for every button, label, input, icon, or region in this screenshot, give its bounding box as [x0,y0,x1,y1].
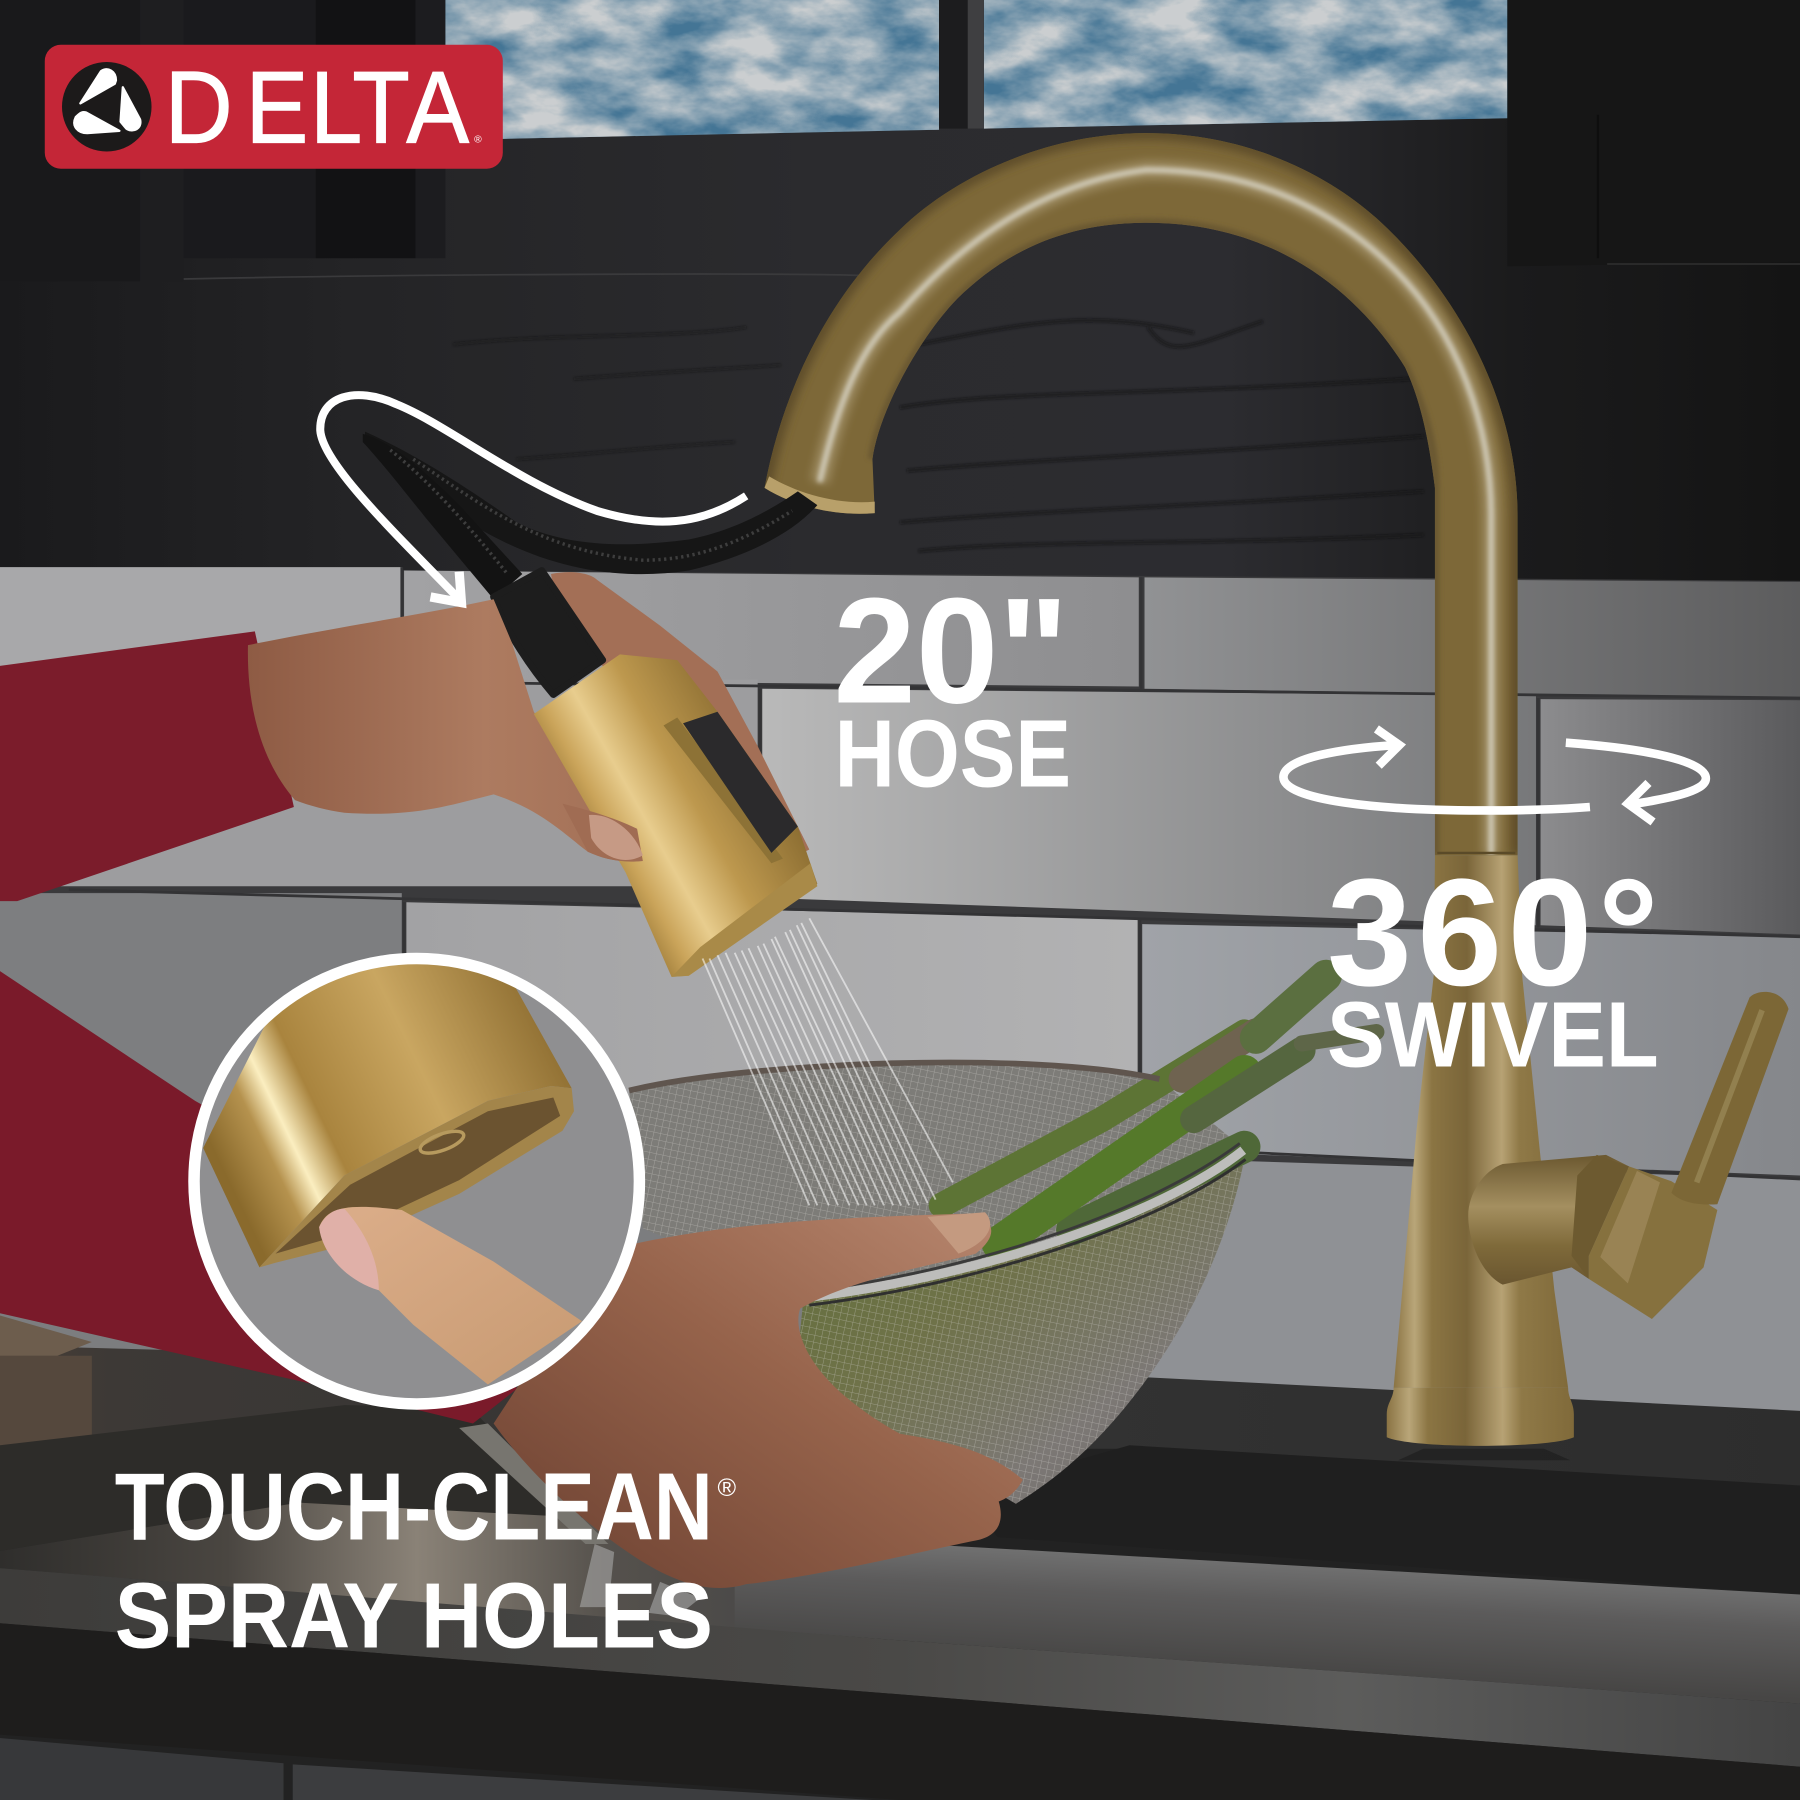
hose connector [494,571,603,695]
handle collar [1572,1155,1629,1279]
water spray [703,918,953,1205]
text: 360 degree swivel: 360° [1327,848,1659,1018]
text: 20" hose: 20" [833,567,1069,735]
logo: Delta [45,45,503,169]
handle hub [1468,1155,1629,1285]
finger nail [319,1209,379,1290]
text: touch-clean spray holes [115,1454,736,1667]
lower hand [494,1212,1023,1616]
handle cap [1589,1166,1717,1319]
colander interior [629,1062,1246,1297]
upper hand [248,599,643,862]
text: 360 degree swivel: SWIVEL [1327,982,1659,1086]
spray button [683,712,798,853]
wordmark: DELTA [165,50,470,164]
nozzle close-up [203,953,572,1267]
cutting board [0,1316,92,1356]
cabinet background [0,0,1800,583]
pull-out hose [363,432,817,599]
faucet body [1394,855,1568,1388]
text: touch-clean spray holes: ® [717,1474,736,1502]
text: 20" hose [833,567,1071,807]
text: touch-clean spray holes: SPRAY HOLES [115,1563,713,1667]
thumb nail [589,815,643,860]
lower cabinet [0,1738,284,1800]
text: 20" hose: HOSE [835,701,1071,807]
inset: touch-clean spray holes [194,953,639,1404]
nozzle rim [259,1086,574,1267]
icon: delta triangle mark [62,62,152,152]
gooseneck spout [765,133,1518,855]
registered mark: ® [474,134,482,145]
arrow: hose length [320,395,746,603]
lower sleeve [0,971,517,1423]
countertop and sink [0,1316,1800,1800]
thumb nail [928,1212,990,1254]
tiled backsplash [0,567,1800,1423]
window with sky [445,0,1507,143]
colander rim [629,1062,1159,1091]
pull-down sprayer [534,654,817,977]
nozzle spray face [276,1097,560,1254]
faucet base collar [1387,1388,1574,1446]
handle lever [1671,992,1789,1204]
finger [319,1207,582,1384]
asparagus [941,976,1376,1243]
upper sleeve [0,631,294,901]
colander bowl [798,1153,1246,1504]
front counter [0,1568,1800,1767]
spout tip rim [765,476,875,514]
colander [459,976,1376,1544]
faucet [765,133,1789,1460]
sink basin [0,1503,758,1630]
upper hand back fingers [551,572,809,855]
thumb [562,804,643,862]
water drip [580,1544,700,1616]
arrow: swivel rotation [1283,729,1706,822]
text: touch-clean spray holes: TOUCH-CLEAN [115,1454,713,1560]
